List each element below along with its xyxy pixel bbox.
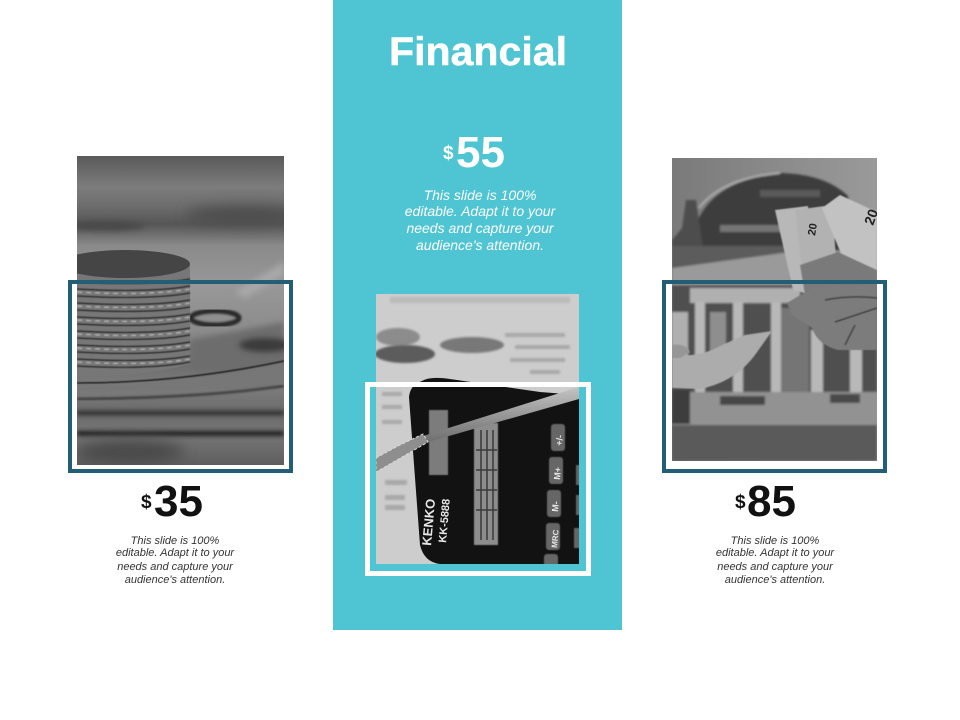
- left price: $: [141, 492, 152, 513]
- right price: 85: [747, 477, 796, 526]
- photo: calculator and pen: M+: [552, 467, 563, 480]
- center frame: [368, 384, 588, 574]
- photo: calculator and pen: KENKO: [419, 498, 438, 546]
- photo: calculator and pen: [375, 294, 581, 568]
- title: Financial: [389, 30, 567, 74]
- right description: [716, 535, 835, 586]
- center price: $: [443, 143, 454, 164]
- photo: banknotes exchanged before domed building: [672, 158, 881, 461]
- center price: 55: [456, 128, 505, 177]
- photo: banknotes exchanged before domed building: 20: [806, 222, 820, 237]
- center description: [405, 187, 557, 253]
- left description: editable. Adapt it to your: [116, 547, 235, 559]
- right description: editable. Adapt it to your: [716, 547, 835, 559]
- center description: audience's attention.: [416, 237, 544, 253]
- left description: [116, 535, 235, 586]
- left description: needs and capture your: [117, 561, 234, 573]
- right description: audience's attention.: [725, 574, 825, 586]
- right price: $: [735, 492, 746, 513]
- left description: audience's attention.: [125, 574, 225, 586]
- right description: needs and capture your: [717, 561, 834, 573]
- left description: This slide is 100%: [131, 535, 220, 547]
- center description: This slide is 100%: [424, 187, 536, 203]
- photo: calculator and pen: KK-5888: [437, 498, 453, 543]
- photo: calculator and pen: MRC: [550, 529, 561, 548]
- center teal panel: [333, 0, 622, 630]
- photo: banknotes exchanged before domed building: 20: [861, 207, 881, 227]
- photo: coin stack on banknotes: [77, 156, 284, 465]
- hand and banknotes: [672, 195, 877, 389]
- right frame: [664, 282, 885, 471]
- left frame: [70, 282, 291, 471]
- center description: editable. Adapt it to your: [405, 203, 557, 219]
- photo: calculator and pen: M-: [550, 501, 561, 512]
- right description: This slide is 100%: [731, 535, 820, 547]
- left price: 35: [154, 477, 203, 526]
- center description: needs and capture your: [406, 220, 555, 236]
- photo: calculator and pen: +/-: [554, 435, 565, 446]
